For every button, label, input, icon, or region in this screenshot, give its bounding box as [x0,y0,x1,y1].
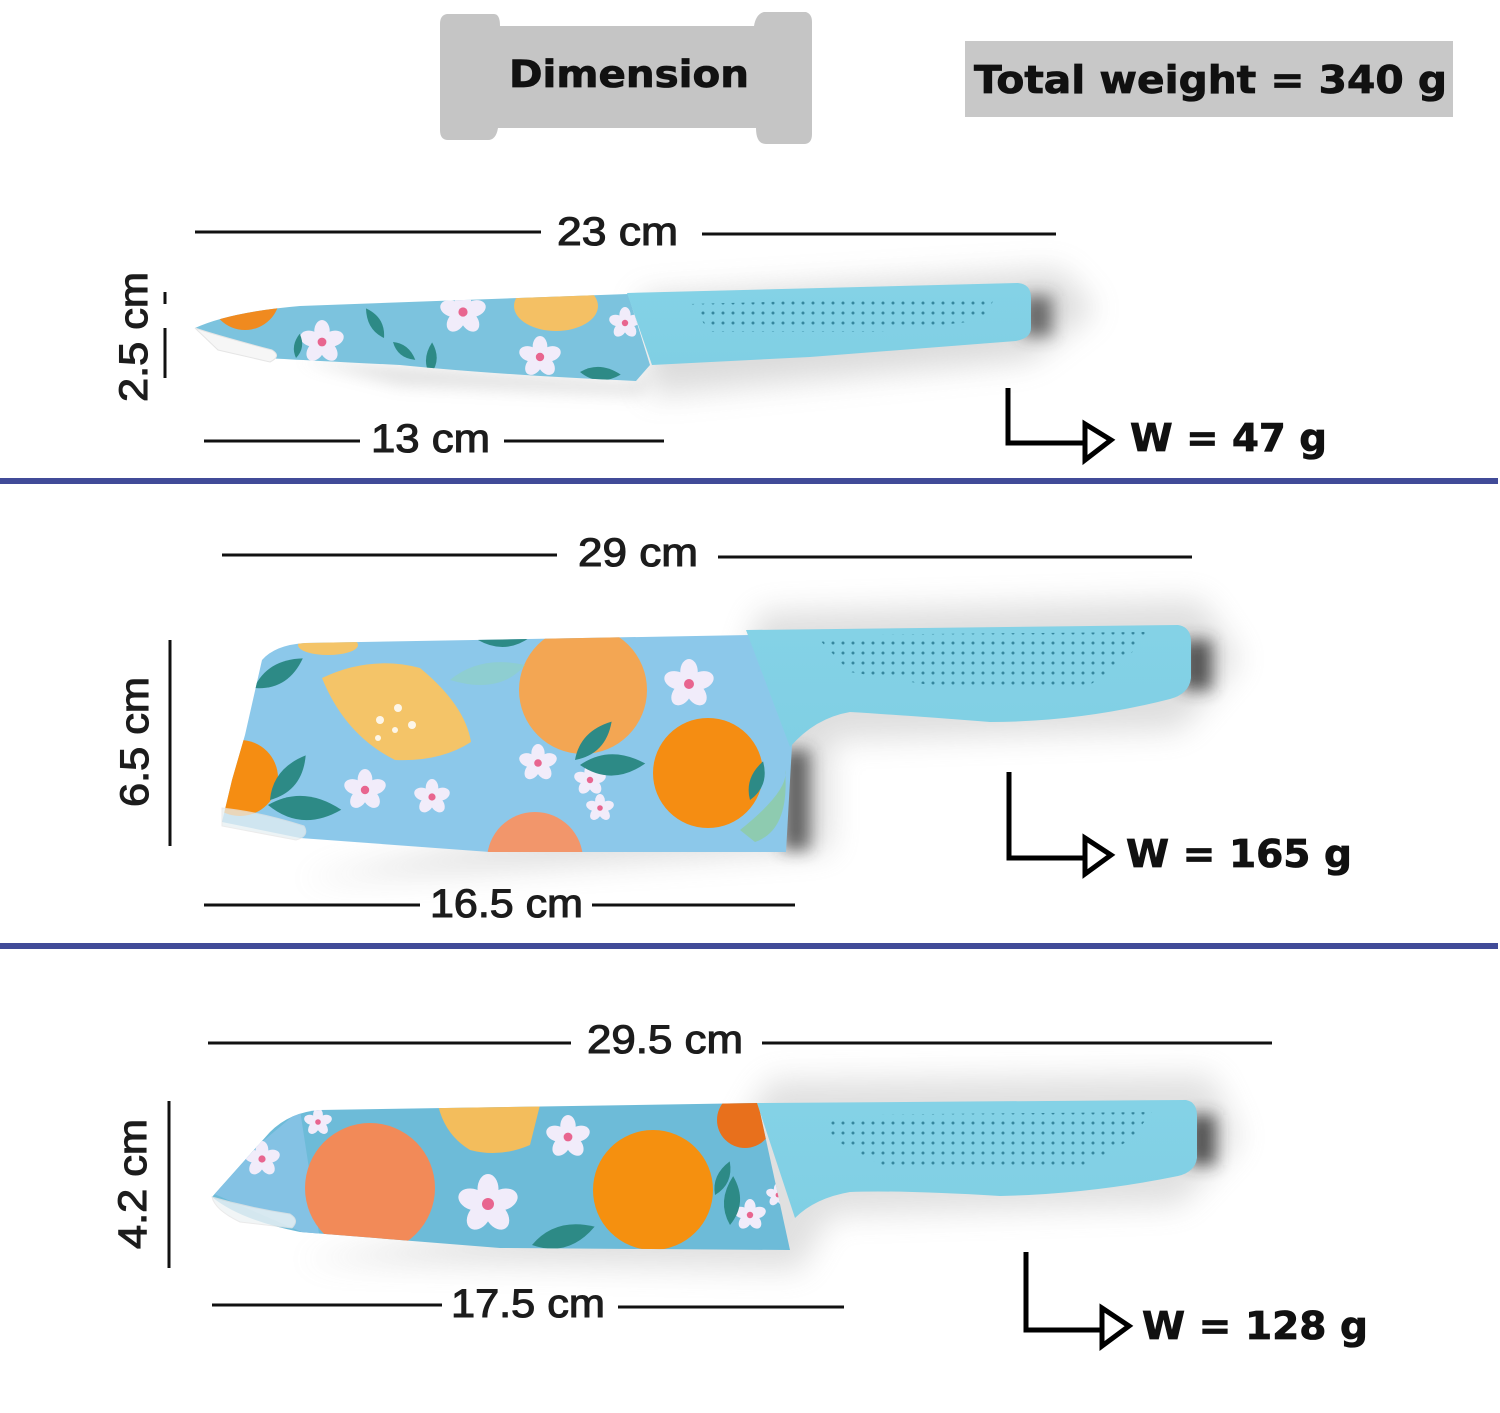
knife handle [627,283,1031,365]
knife blade with sheath pattern [212,1103,790,1250]
weight: 47 g: W = 47 g [1130,416,1327,460]
handle grip dots [815,632,1148,690]
blade length: 16.5 cm: 16.5 cm [430,882,583,926]
panel: santoku knife [111,1018,1368,1348]
blade length: 17.5 cm: 17.5 cm [451,1282,605,1326]
knife shadow [300,600,1240,880]
length dimension: 29 cm: 29 cm [578,531,698,575]
weight: 165 g: W = 165 g [1126,832,1352,876]
sheath tip [222,808,306,840]
length dimension: 29.5 cm: 29.5 cm [587,1018,743,1062]
divider [0,478,1498,484]
panel: cleaver [113,531,1352,926]
length dimension: 23 cm: 23 cm [557,210,678,254]
height dimension: 6.5 cm: 6.5 cm [113,677,157,807]
height dimension: 4.2 cm: 4.2 cm [111,1119,155,1249]
knife shadow [300,1075,1240,1270]
height dimension: 2.5 cm: 2.5 cm [112,272,156,402]
panel: small knife [112,210,1327,461]
handle grip dots [822,1112,1152,1165]
knife blade with sheath pattern [222,635,792,852]
weight: 165 g [1009,772,1352,876]
knife blade with sheath pattern [196,294,650,381]
blade length: 13 cm: 13 cm [371,417,490,461]
sheath tip [195,328,277,362]
sheath tip [212,1197,296,1228]
weight: 128 g [1026,1252,1368,1348]
heading badge: Dimension [440,12,812,144]
total weight badge [965,41,1453,117]
knife shadow [300,270,1095,395]
weight: 47 g [1008,388,1327,460]
knife handle [757,1100,1197,1218]
divider [0,943,1498,949]
weight: 128 g: W = 128 g [1142,1304,1368,1348]
knife handle [746,625,1191,747]
total weight badge: Total weight = 340 g [974,58,1447,102]
heading badge: Dimension: Dimension [509,53,749,96]
handle grip dots [690,296,995,332]
